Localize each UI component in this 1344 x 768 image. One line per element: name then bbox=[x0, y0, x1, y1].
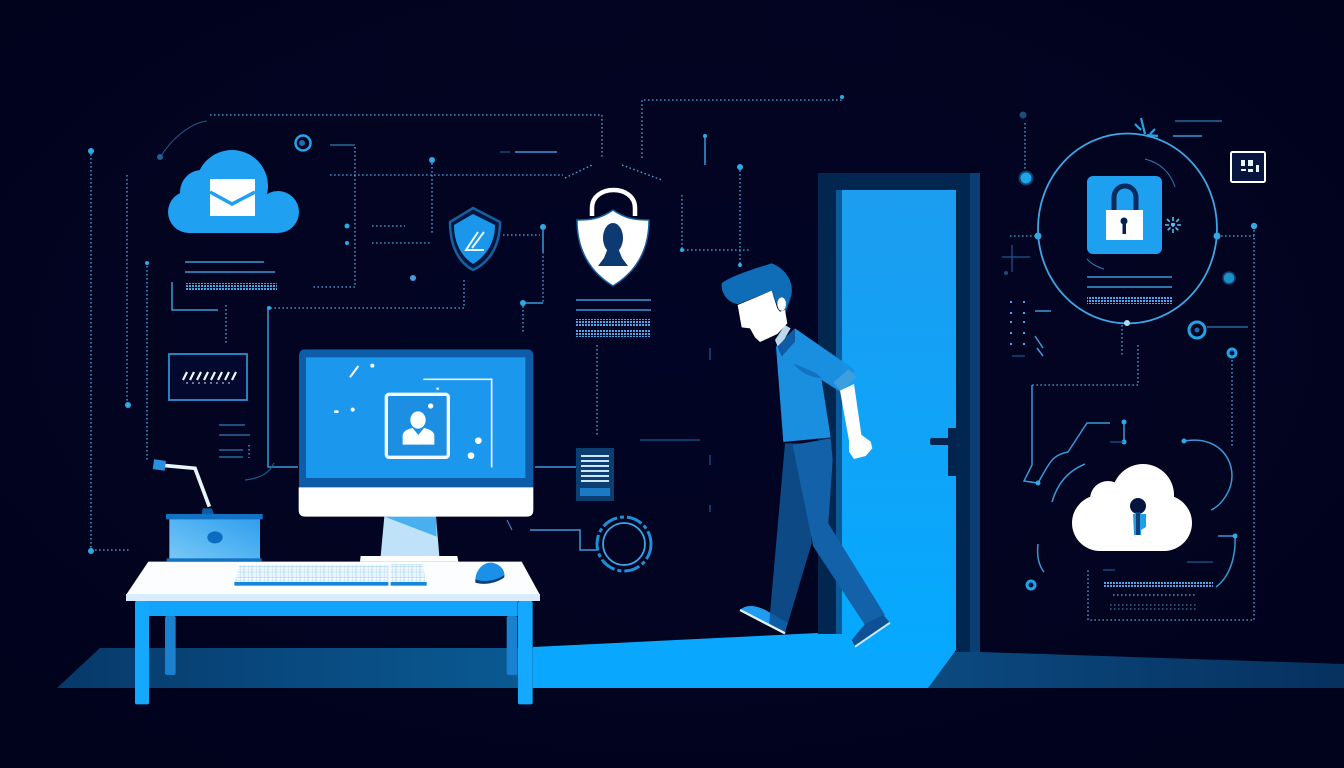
icon: padlock shield with person bbox=[577, 190, 649, 286]
monitor stand bbox=[360, 517, 458, 562]
password panel bbox=[169, 354, 247, 400]
keyboard bbox=[234, 564, 427, 586]
mouse bbox=[475, 563, 504, 584]
icon: small shield bbox=[450, 208, 500, 270]
icon: device badge bbox=[1231, 152, 1265, 182]
text lines under cloud bbox=[185, 262, 277, 290]
door handle bbox=[930, 428, 956, 476]
icon: star burst bbox=[1165, 217, 1182, 233]
text lines in circle bbox=[1087, 277, 1173, 304]
circuit lines: left and centre bbox=[88, 95, 844, 554]
icon: spark top of circle bbox=[1135, 118, 1158, 136]
monitor bbox=[299, 349, 533, 517]
desk top bbox=[126, 562, 540, 704]
icon: white cloud with keyhole bbox=[1072, 464, 1192, 551]
door bbox=[818, 173, 980, 652]
icon: target ring top left bbox=[296, 136, 310, 150]
circuit lines: right bbox=[1002, 112, 1257, 620]
dashed progress ring bbox=[597, 517, 651, 571]
desk box with lamp bbox=[153, 459, 263, 561]
profile card on screen bbox=[386, 394, 448, 457]
person walking out bbox=[722, 263, 890, 647]
icons: small rings right bbox=[1020, 172, 1236, 589]
small text lines by monitor bbox=[219, 425, 250, 458]
desk with monitor and accessories bbox=[126, 349, 540, 704]
text lines under padlock shield bbox=[576, 300, 651, 337]
icon: large circle with padlock bbox=[1034, 134, 1220, 326]
text lines under white cloud bbox=[1103, 581, 1213, 588]
icon: cloud with envelope bbox=[168, 150, 299, 233]
small document bbox=[576, 448, 614, 501]
floor with light spill bbox=[57, 633, 1344, 688]
